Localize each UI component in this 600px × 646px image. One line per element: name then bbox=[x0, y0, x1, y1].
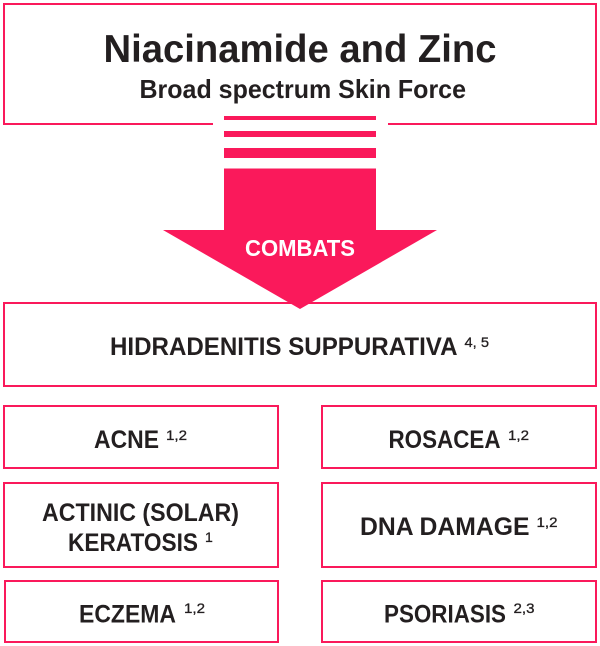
panel: psoriasis: PSORIASIS bbox=[384, 600, 506, 628]
panel: rosacea: 1,2 bbox=[508, 427, 529, 443]
panel: hidradenitis suppurativa bbox=[4, 303, 596, 386]
arrow: combats bbox=[163, 116, 437, 309]
panel: actinic keratosis: ACTINIC (SOLAR) bbox=[42, 499, 239, 527]
panel: acne: 1,2 bbox=[166, 427, 187, 443]
panel: psoriasis bbox=[322, 581, 596, 642]
title: Niacinamide and Zinc bbox=[104, 28, 496, 71]
panel: acne bbox=[4, 406, 278, 468]
panel: hidradenitis suppurativa: HIDRADENITIS SUPPURATIVA bbox=[110, 333, 458, 361]
panel: actinic keratosis: KERATOSIS bbox=[68, 529, 198, 557]
panel: eczema bbox=[5, 581, 278, 642]
panel: title box bbox=[4, 4, 596, 128]
arrow: combats: COMBATS bbox=[245, 235, 355, 261]
panel: eczema: 1,2 bbox=[184, 600, 205, 616]
panel: dna damage bbox=[322, 483, 596, 567]
panel: actinic keratosis: 1 bbox=[205, 529, 213, 545]
panel: eczema: ECZEMA bbox=[79, 600, 176, 628]
panel: actinic keratosis bbox=[4, 483, 278, 567]
subtitle: Broad spectrum Skin Force bbox=[140, 74, 466, 104]
panel: dna damage: DNA DAMAGE bbox=[360, 513, 530, 541]
panel: rosacea: ROSACEA bbox=[388, 426, 500, 454]
panel: rosacea bbox=[322, 406, 596, 468]
panel: hidradenitis suppurativa: 4, 5 bbox=[464, 334, 489, 350]
panel: acne: ACNE bbox=[94, 426, 159, 454]
panel: psoriasis: 2,3 bbox=[514, 600, 535, 616]
panel: dna damage: 1,2 bbox=[536, 514, 558, 530]
